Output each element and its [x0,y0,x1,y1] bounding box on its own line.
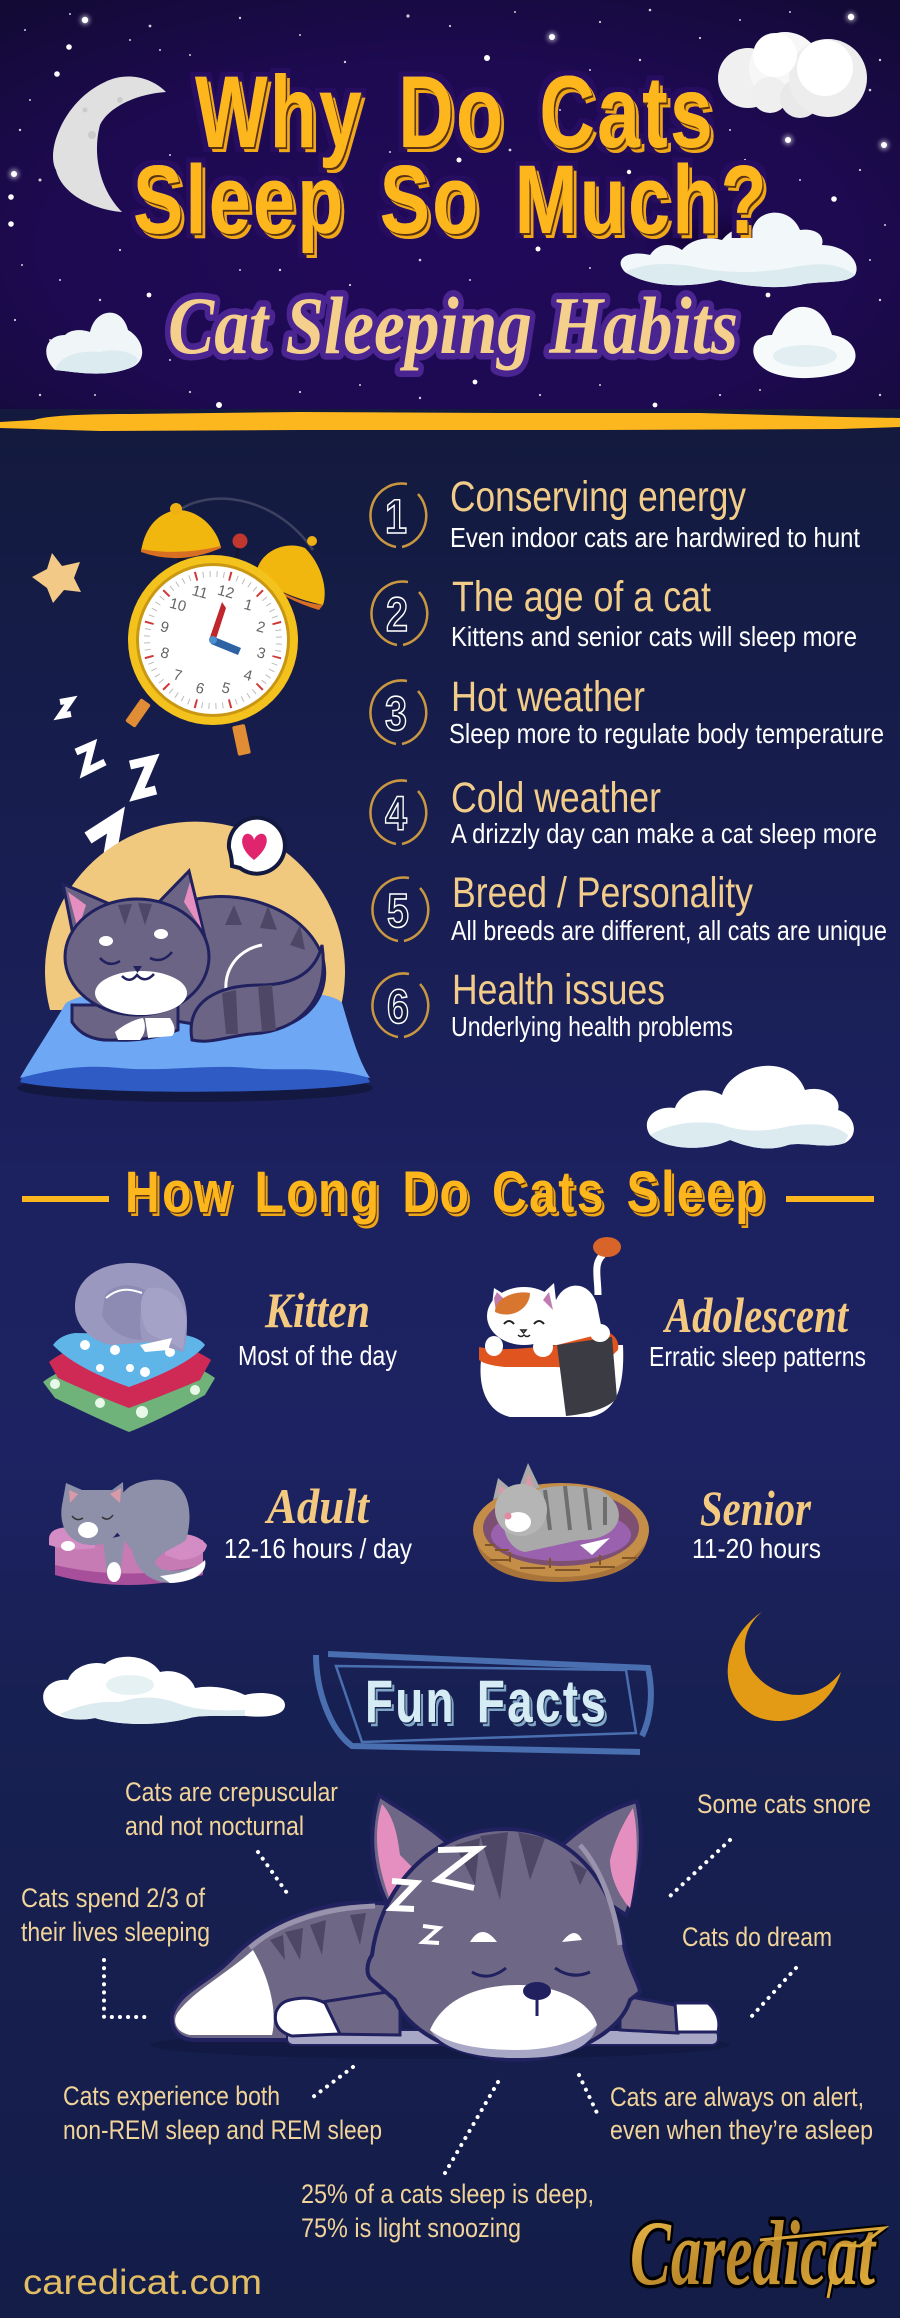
icon: alarm clock: 2 [255,618,267,637]
reason 5: 5 [387,885,409,938]
icon: alarm clock: 5 [220,679,232,698]
cloud: between sections [647,1066,854,1148]
icon: alarm clock: 9 [158,618,171,637]
fact: alert: Cats are always on alert, [610,2082,864,2112]
icon: floating Z letters [60,700,156,866]
panel: night sky header [0,0,900,412]
illustration: cat in wicker basket [473,1463,649,1582]
reason 6: Underlying health problems [451,1011,733,1042]
fact: alert [610,2082,873,2145]
icon: alarm clock [125,499,325,756]
icon: heart speech bubble [229,818,285,874]
fact: deep sleep: 75% is light snoozing [301,2213,521,2243]
panel: senior: Senior [700,1480,811,1536]
illustration: cat on sushi [479,1237,623,1417]
fact: deep sleep [301,2179,594,2243]
panel: senior: 11-20 hours [692,1533,821,1564]
paws [72,1005,178,1040]
eyes and nose [472,1968,590,1976]
panel: adult [49,1478,412,1585]
reason 5: Breed / Personality [452,869,753,917]
website url: caredicat.com [23,2263,262,2302]
icon: white crescent moon [53,77,166,212]
panel: sleeping reasons list [370,473,887,1042]
reason 6: 6 [387,981,409,1034]
icon: alarm clock: 8 [159,644,171,663]
title: Why Do Cats [195,55,715,169]
reason 4 [370,774,877,849]
section heading: How Long Do Cats Sleep: How Long Do Cats Sleep [125,1160,767,1225]
hump and tail [115,1480,202,1583]
icon: Z letters on cat [392,1849,478,1943]
body and tail [170,897,325,1032]
reason 1 [370,473,860,553]
icon: orange crescent moon [728,1611,841,1721]
subtitle: Cat Sleeping Habits [168,280,738,371]
panel: kitten [43,1263,397,1432]
gold brush divider [0,412,900,431]
dotted connector lines [104,1840,796,2173]
rice [480,1345,623,1417]
icon: alarm clock: 4 [242,666,254,685]
reason 3 [370,673,884,749]
panel: kitten: Most of the day [238,1340,397,1371]
panel: adult: Adult [264,1478,371,1534]
illustration: cat sleeping on pillow [17,822,373,1102]
nori [557,1337,617,1416]
illustration: kitten on pillows [43,1263,215,1432]
reason 1: Conserving energy [450,473,746,521]
icon: alarm clock: 6 [194,679,206,698]
fact: crepuscular [125,1777,338,1841]
fact: snore: Some cats snore [697,1789,871,1819]
pillow [20,991,370,1092]
cloud: lower left [46,313,142,374]
reason 4: Cold weather [451,774,661,822]
cloud: lower left [43,1657,285,1724]
head [367,1829,640,2060]
fact: dream: Cats do dream [682,1922,832,1952]
fact: REM [63,2081,382,2145]
fact: two thirds [21,1883,210,1947]
illustration: cat on cushion [49,1480,207,1585]
reason 3: Hot weather [451,673,645,721]
cloud: top right [718,32,867,118]
body [172,1902,400,2040]
reason 2: The age of a cat [452,573,711,621]
head [65,899,209,1015]
illustration: big sleeping cat [150,1795,730,2060]
reason 6 [372,966,733,1042]
star glows [9,12,889,179]
panel: kitten: Kitten [264,1282,370,1338]
icon: alarm clock: 1 [242,596,254,615]
icon: alarm clock: 7 [171,666,184,685]
fact: crepuscular: and not nocturnal [125,1811,304,1841]
icon: alarm clock: 12 [216,582,236,603]
fact: deep sleep: 25% of a cats sleep is deep, [301,2179,594,2209]
reason 5 [372,869,887,946]
starfield [8,9,887,408]
head [61,1482,124,1545]
reason 4: 4 [385,788,407,841]
reason 1: 1 [385,491,407,544]
ears [372,1795,470,1905]
fact: crepuscular: Cats are crepuscular [125,1777,338,1807]
tan moon disc [45,822,345,1010]
icon: star [32,553,81,603]
fact: two thirds: Cats spend 2/3 of [21,1883,205,1913]
ears [63,884,112,940]
section heading: Fun Facts plaque [316,1654,651,1752]
icon: alarm clock: 11 [190,582,210,603]
ground strip and paws [287,2030,718,2045]
fact: REM: Cats experience both [63,2081,280,2111]
reason 2 [371,573,857,652]
section heading: Fun Facts plaque: Fun Facts [365,1668,608,1735]
cloud: lower right [753,307,856,378]
reason 3: 3 [385,688,407,741]
fact: REM: non-REM sleep and REM sleep [63,2115,382,2145]
panel: adult: 12-16 hours / day [224,1533,412,1564]
panel: fun fact labels [21,1777,873,2243]
salmon [479,1332,618,1367]
reason 2: 2 [386,589,408,642]
cloud: middle right [621,213,857,287]
icon: alarm clock: 3 [255,644,267,663]
title [133,55,769,254]
panel: adolescent: Adolescent [663,1287,850,1343]
icon: alarm clock: 10 [168,595,188,616]
cloud shadow behind question mark [660,222,780,254]
panel: adolescent [479,1237,866,1417]
panel: senior [473,1463,821,1582]
fact: two thirds: their lives sleeping [21,1917,210,1947]
reason 6: Health issues [452,966,665,1014]
